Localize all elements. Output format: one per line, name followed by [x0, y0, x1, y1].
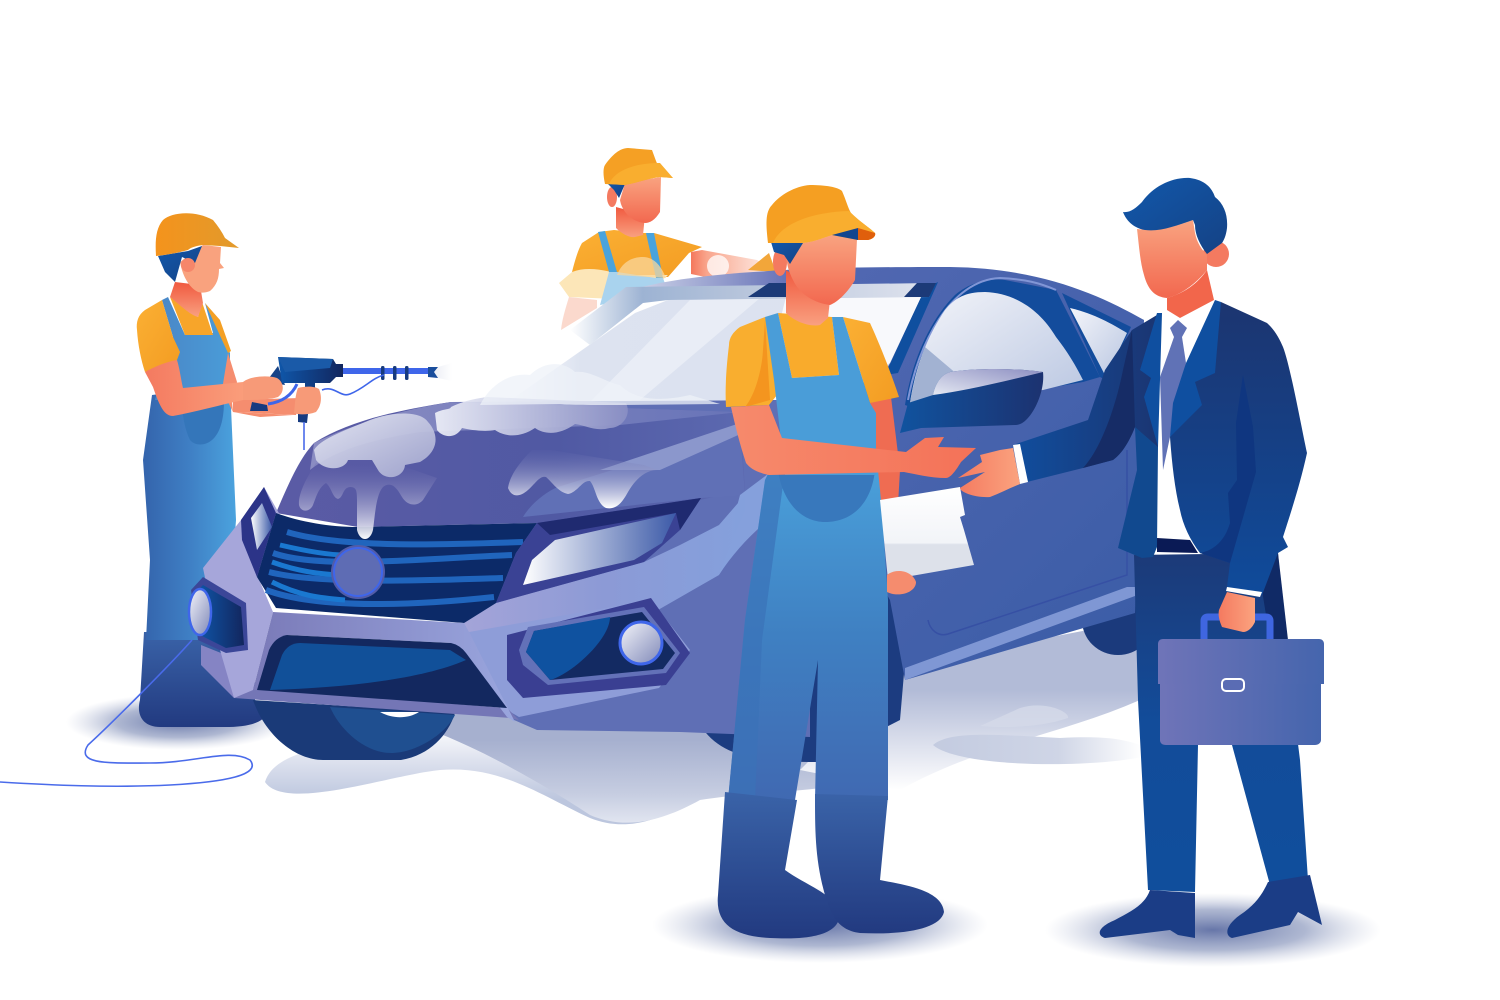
shadow: left worker [66, 694, 290, 750]
left fender lower [201, 645, 253, 698]
rear wheel [1082, 585, 1154, 655]
foam: hood right drips [508, 450, 657, 508]
grille slats [266, 532, 523, 604]
left worker neck [170, 282, 203, 317]
worker: rear, wiping windscreen [559, 148, 776, 330]
left worker legs [143, 385, 236, 640]
foam on car [299, 364, 720, 539]
front worker bib and straps [765, 313, 876, 475]
rear worker shirt [572, 230, 702, 277]
door seam [928, 450, 1127, 635]
left worker hands [243, 376, 283, 400]
grille [257, 513, 537, 623]
right fog lamp [620, 622, 662, 664]
hood [276, 402, 745, 527]
far front wheel [700, 560, 906, 762]
left headlight housing [241, 487, 276, 577]
businessman shoes [1100, 890, 1195, 938]
worker: left with pressure washer [137, 213, 300, 727]
businessman neck [1167, 270, 1214, 318]
side sill highlight [905, 587, 1135, 680]
businessman hand right [1219, 592, 1255, 632]
left fog lamp housing [191, 577, 248, 653]
body base under front [451, 400, 810, 737]
lower bumper centre [234, 688, 519, 720]
businessman [958, 178, 1324, 938]
left worker bib pocket [182, 400, 224, 444]
front worker skin behind bib [870, 397, 900, 505]
rear worker neck [616, 207, 645, 237]
businessman jacket right [1170, 302, 1307, 595]
businessman cuff [1013, 444, 1028, 484]
lower intake [257, 635, 507, 708]
rear side window frame [1062, 293, 1131, 380]
left worker boots [139, 632, 268, 727]
car [189, 267, 1154, 762]
lower bumper right [469, 600, 690, 717]
shadow: car ground [265, 620, 1142, 824]
left worker far arm [222, 353, 293, 417]
front worker shirt left sleeve [726, 317, 785, 407]
front worker other hand [887, 571, 916, 594]
door frame highlight [908, 278, 1056, 400]
water hose [0, 422, 304, 786]
clipboard [880, 487, 974, 580]
hood right panel [523, 430, 745, 517]
centre bumper band [253, 612, 515, 722]
businessman ear [1203, 241, 1229, 267]
businessman cuff right [1226, 587, 1262, 597]
worker: front in overalls [718, 185, 976, 938]
right headlight [496, 498, 701, 603]
businessman belt [1157, 538, 1198, 553]
front worker cap [767, 185, 875, 243]
foam: cowl clouds [435, 397, 628, 436]
windscreen glass [505, 297, 921, 406]
businessman right lapel [1170, 300, 1221, 437]
businessman briefcase [1158, 617, 1324, 745]
left worker cap [156, 213, 239, 256]
windscreen bottom strip [510, 403, 735, 412]
briefcase lid [1158, 639, 1324, 684]
left fender [203, 487, 280, 698]
grille badge [331, 545, 385, 599]
businessman tie [1160, 320, 1187, 470]
foam: hood clump [314, 414, 436, 477]
front worker pouch [778, 470, 875, 522]
left fog lamp [189, 589, 211, 635]
businessman hair [1123, 178, 1227, 254]
businessman trousers [1134, 553, 1308, 892]
foam: hood left drips [299, 463, 437, 539]
front worker trousers [728, 470, 888, 800]
rear side window [1070, 308, 1127, 377]
rear worker face [620, 177, 661, 223]
rear worker cap [604, 148, 673, 185]
left headlight lens [251, 503, 272, 550]
left worker head [180, 245, 224, 293]
businessman left lapel [1140, 313, 1162, 447]
pressure washer gun [243, 357, 452, 423]
rear worker straps [598, 231, 663, 278]
left worker apron [155, 297, 230, 400]
side front panel [719, 465, 800, 575]
foam: windscreen clouds [480, 364, 720, 405]
front worker ear [773, 248, 787, 276]
roof left edge [625, 270, 790, 295]
fender band [464, 495, 745, 650]
briefcase handle [1204, 617, 1270, 640]
businessman face [1137, 220, 1207, 298]
businessman left coat [1118, 370, 1158, 558]
briefcase bottom [1160, 684, 1321, 745]
rear worker arm [691, 250, 770, 279]
rear worker bib [600, 272, 668, 305]
right fog lamp housing [507, 598, 690, 698]
front worker shirt centre [778, 313, 839, 378]
businessman hand [958, 448, 1020, 497]
near front wheel [253, 700, 455, 760]
front worker arm and hand [731, 405, 976, 478]
windscreen pillar [885, 282, 938, 375]
front worker face [787, 235, 857, 305]
windscreen top frame [570, 283, 933, 345]
shadow: front worker [652, 887, 988, 963]
left worker near arm [145, 360, 260, 416]
rear worker faded arm [561, 297, 597, 330]
left worker hair [158, 246, 202, 282]
hood crease lighter [310, 402, 740, 470]
door window [910, 292, 1083, 405]
front worker shirt right sleeve [843, 317, 899, 403]
front worker boots [718, 792, 840, 938]
car roof and side body [730, 267, 1144, 680]
businessman reaching arm [1013, 315, 1158, 482]
front worker hair [771, 242, 803, 264]
shadow: businessman [1045, 893, 1381, 967]
rear worker hair [607, 183, 625, 198]
rear worker ear [607, 187, 617, 207]
left worker shirt [137, 300, 180, 372]
front worker neck [786, 270, 830, 325]
businessman shirt [1158, 300, 1215, 540]
mirror [900, 369, 1043, 433]
door frame dark [905, 280, 1100, 410]
